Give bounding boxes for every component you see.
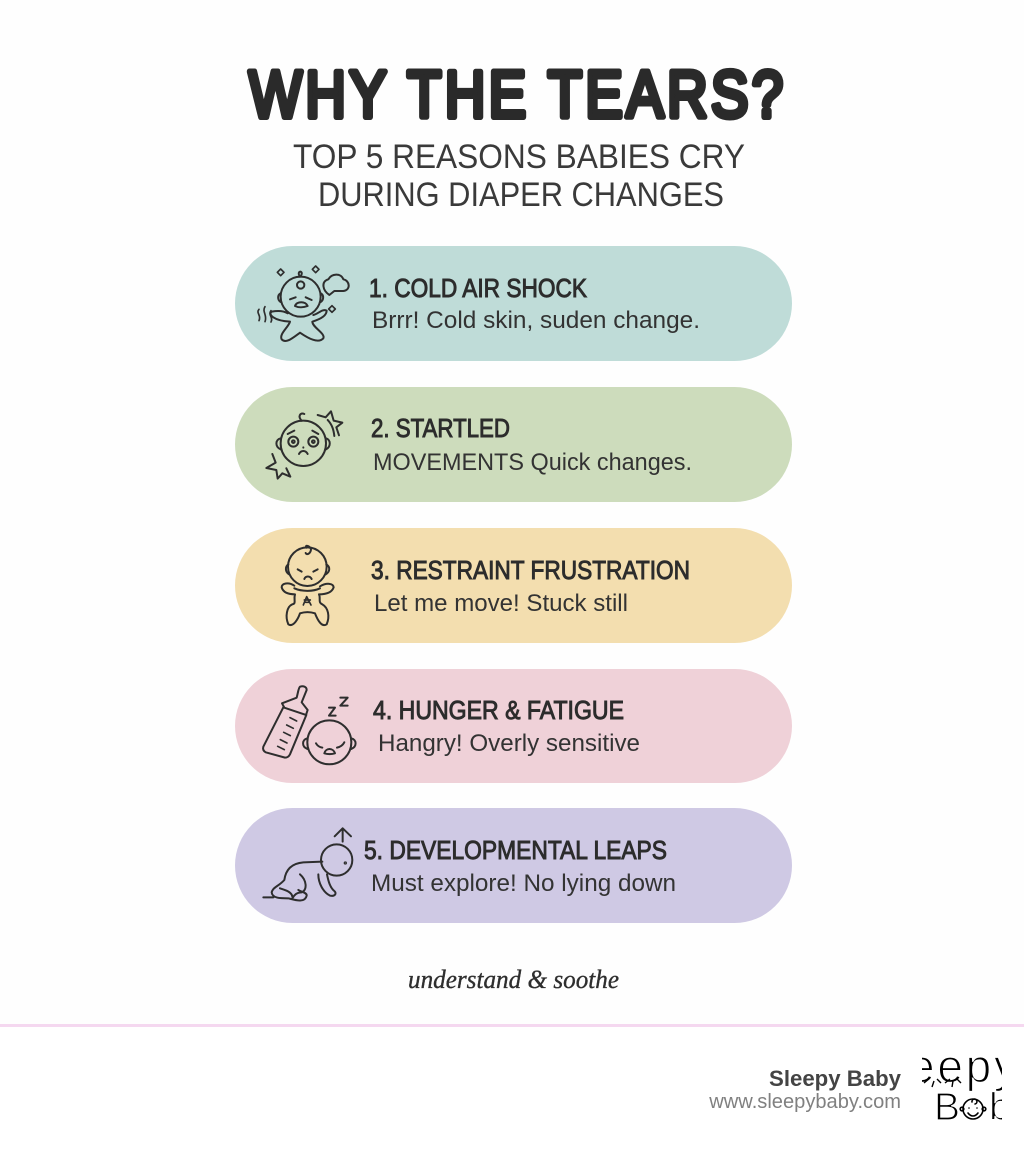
icon: cold baby	[258, 266, 349, 341]
panel: restraint frustration	[235, 528, 792, 643]
body text: Must explore! No lying down	[371, 870, 676, 897]
subtitle: DURING DIAPER CHANGES	[318, 176, 724, 214]
subtitle: TOP 5 REASONS BABIES CRY	[293, 138, 745, 176]
body text: Hangry! Overly sensitive	[378, 730, 640, 757]
icon: bottle and sleeping baby	[263, 686, 356, 764]
heading: 3. RESTRAINT FRUSTRATION	[371, 557, 690, 585]
icon: crawling baby	[263, 828, 352, 900]
icon: restrained baby	[282, 546, 334, 625]
body text: MOVEMENTS Quick changes.	[373, 449, 692, 476]
heading: 1. COLD AIR SHOCK	[369, 275, 587, 303]
panel: developmental leaps	[235, 808, 792, 923]
heading: 5. DEVELOPMENTAL LEAPS	[364, 837, 667, 865]
subtitle	[293, 138, 745, 214]
logo: eepy	[909, 1040, 1017, 1092]
panel: startled	[235, 387, 792, 502]
panel: hunger and fatigue	[235, 669, 792, 783]
icon: logo baby face	[960, 1099, 986, 1119]
title: WHY THE TEARS?	[249, 58, 783, 131]
tagline: understand & soothe	[408, 965, 619, 994]
logo	[922, 1058, 1002, 1120]
heading: 4. HUNGER & FATIGUE	[373, 697, 624, 725]
footer brand: www.sleepybaby.com	[708, 1091, 901, 1113]
body text: Let me move! Stuck still	[374, 590, 628, 617]
footer brand: Sleepy Baby	[769, 1066, 902, 1091]
heading: 2. STARTLED	[371, 415, 510, 443]
body text: Brrr! Cold skin, suden change.	[372, 307, 700, 334]
logo: B	[934, 1086, 960, 1129]
logo: b	[989, 1086, 1011, 1129]
footer divider	[0, 1024, 1024, 1027]
footer brand	[708, 1066, 902, 1113]
panel: cold air shock	[235, 246, 792, 361]
icon: startled baby	[266, 411, 342, 479]
